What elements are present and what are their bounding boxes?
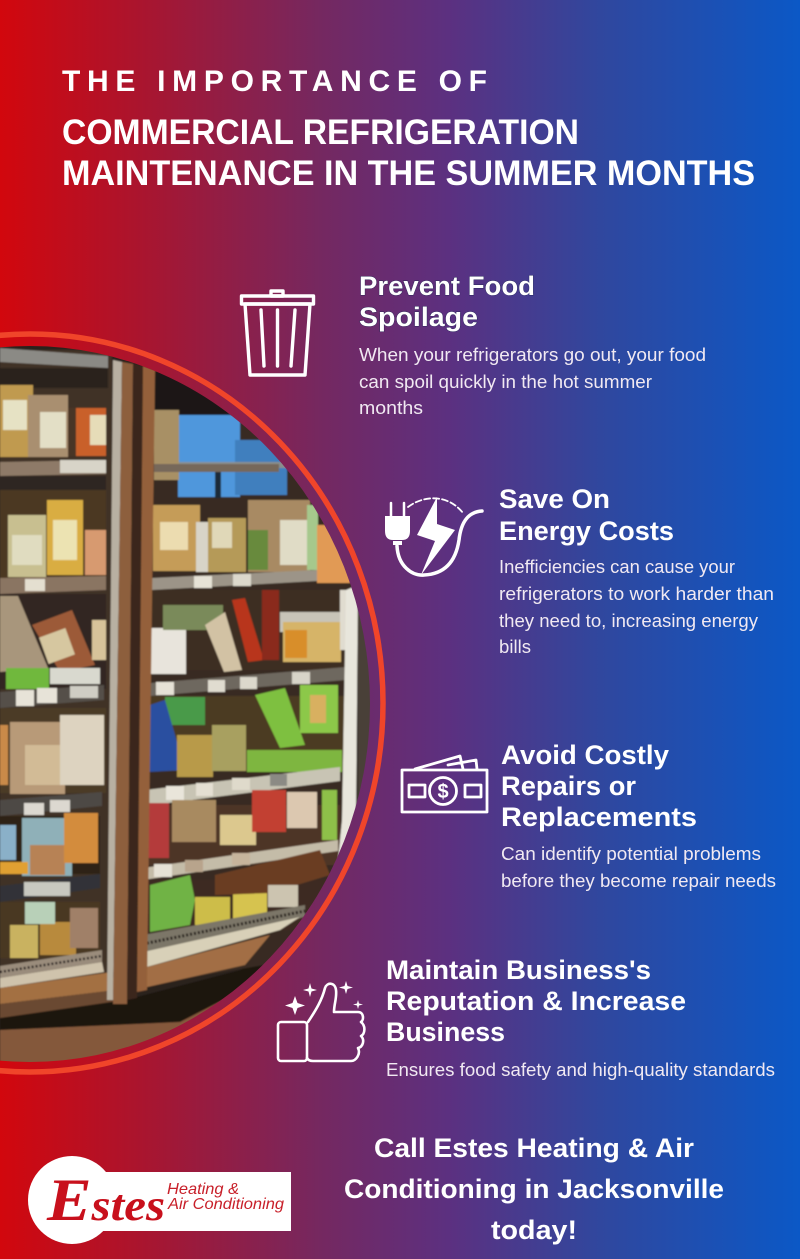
left row 6	[0, 902, 100, 958]
icon: thumbs up with sparkles	[278, 981, 364, 1061]
logo: Estes Heating & Air Conditioning	[28, 1156, 291, 1244]
call to action: today!	[491, 1215, 577, 1245]
call to action: Call Estes Heating & Air	[374, 1133, 695, 1163]
title main line one: COMMERCIAL REFRIGERATION	[62, 113, 579, 152]
left row 2	[0, 490, 106, 580]
heading: Energy Costs	[499, 516, 674, 546]
right vent and bottom frame	[143, 905, 305, 952]
door frames	[107, 360, 122, 1000]
right row 3	[151, 696, 344, 750]
heading	[499, 484, 674, 546]
logo: Estes Heating & Air Conditioning: Estes	[46, 1167, 165, 1233]
heading: Save On	[499, 484, 610, 514]
heading	[359, 271, 535, 332]
item: avoid costly repairs	[402, 740, 776, 891]
icon: banknotes	[402, 756, 487, 812]
blue reflection	[178, 415, 240, 497]
heading: Business	[386, 1017, 505, 1047]
white pillar right side	[338, 585, 358, 860]
item: prevent food spoilage	[242, 271, 706, 418]
heading: Spoilage	[359, 302, 478, 332]
title kicker: THE IMPORTANCE OF	[62, 65, 487, 98]
heading: Maintain Business's	[386, 955, 651, 985]
left vent and bottom frame	[0, 950, 102, 978]
description: refrigerators to work harder than	[499, 584, 774, 604]
heading: Repairs or	[501, 771, 636, 801]
left row 4	[0, 708, 106, 793]
heading: Replacements	[501, 802, 697, 832]
title	[62, 65, 755, 193]
description: months	[359, 398, 423, 418]
item: save on energy costs	[385, 484, 774, 657]
heading: Reputation & Increase	[386, 986, 686, 1016]
logo: Estes Heating & Air Conditioning: Air Conditioning	[167, 1196, 284, 1213]
left row 3	[0, 594, 106, 689]
left row 5	[0, 816, 100, 874]
photo: refrigerated display case	[0, 340, 380, 1070]
call to action: Conditioning in Jacksonville	[344, 1174, 724, 1204]
heading	[501, 740, 697, 832]
icon: trash can	[242, 291, 314, 375]
description	[499, 557, 774, 657]
call to action	[344, 1133, 724, 1245]
heading: Prevent Food	[359, 271, 535, 301]
logo: Estes Heating & Air Conditioning: Heating &	[167, 1181, 239, 1198]
left door back	[0, 350, 112, 1010]
description: Can identify potential problems	[501, 844, 761, 864]
right row 4	[145, 805, 340, 865]
heading: Avoid Costly	[501, 740, 669, 770]
description	[359, 345, 706, 418]
description: When your refrigerators go out, your food	[359, 345, 706, 365]
item: maintain reputation	[278, 955, 775, 1080]
left row 1	[0, 385, 33, 457]
orange ring around photo	[0, 334, 383, 1072]
right row 5	[143, 880, 333, 930]
description: bills	[499, 637, 531, 657]
icon: banknotes: $	[437, 781, 449, 803]
description: they need to, increasing energy	[499, 611, 758, 631]
right row 1	[153, 505, 200, 571]
description	[501, 844, 776, 891]
right door back	[148, 423, 351, 973]
title main line two: MAINTENANCE IN THE SUMMER MONTHS	[62, 154, 755, 193]
description: can spoil quickly in the hot summer	[359, 372, 652, 392]
description: Ensures food safety and high-quality standards	[386, 1060, 775, 1080]
right row 2	[150, 590, 355, 670]
description: Inefficiencies can cause your	[499, 557, 735, 577]
icon: plug and lightning bolt	[385, 497, 482, 575]
heading	[386, 955, 686, 1047]
description: before they become repair needs	[501, 871, 776, 891]
